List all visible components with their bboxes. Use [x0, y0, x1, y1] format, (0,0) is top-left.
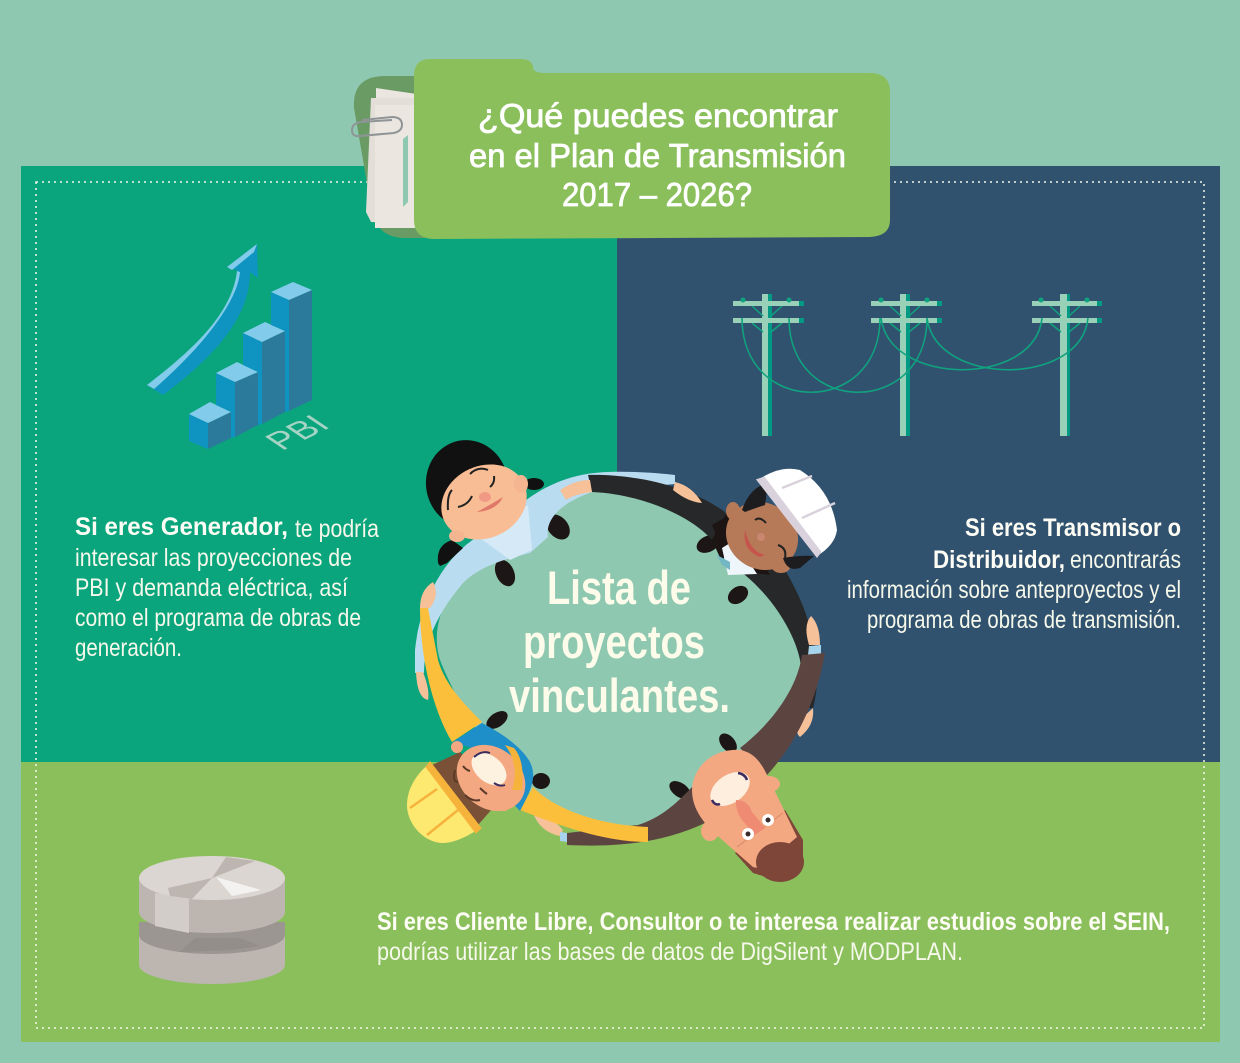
title folder — [352, 59, 890, 239]
yellow worker: cuff — [560, 832, 567, 842]
text: generador — [75, 513, 379, 662]
folder back — [354, 76, 440, 238]
yellow worker: vest — [453, 723, 533, 811]
bar 3 — [243, 322, 285, 425]
text: transmisor o distribuidor: Distribuidor, — [933, 546, 1065, 574]
text: generador: generación. — [75, 634, 182, 662]
text: transmisor o distribuidor: encontrarás — [1070, 546, 1181, 574]
text: lista de proyectos vinculantes — [509, 561, 730, 722]
lower disc — [139, 913, 285, 984]
text: transmisor o distribuidor — [847, 514, 1181, 634]
text: transmisor o distribuidor: Si eres Transmisor o — [965, 514, 1181, 542]
pole 3 — [1032, 294, 1102, 436]
pole 1 — [733, 294, 804, 436]
arrow — [147, 244, 258, 395]
bar 4 — [271, 282, 312, 412]
text: generador: te podría — [295, 515, 379, 543]
text: cliente libre o consultor: podrías utilizar las bases de datos de DigSilent y MODPLAN. — [377, 938, 963, 966]
icon: database — [139, 856, 285, 984]
bar 1 — [189, 402, 231, 449]
text: cliente libre o consultor — [377, 908, 1170, 966]
black-suit man: head and helmet — [712, 469, 837, 583]
hands — [416, 480, 820, 838]
icon: PBI growth bar chart — [147, 244, 338, 455]
shoes — [483, 510, 752, 803]
text: lista de proyectos vinculantes: Lista de — [547, 561, 691, 614]
panel: cliente libre o consultor — [21, 762, 1220, 1042]
text: lista de proyectos vinculantes: vinculantes. — [509, 669, 730, 722]
woman: head — [419, 434, 544, 566]
title text: ¿Qué puedes encontrar — [478, 97, 838, 134]
black-suit man: cuff — [808, 645, 821, 655]
text: generador: interesar las proyecciones de — [75, 544, 352, 572]
title text: 2017 – 2026? — [562, 176, 752, 213]
upper disc — [139, 878, 285, 933]
panel: generador — [21, 166, 617, 763]
papers — [366, 88, 430, 228]
title text: en el Plan de Transmisión — [469, 137, 846, 174]
pole 2 — [871, 294, 942, 436]
panel: transmisor o distribuidor — [617, 166, 1220, 763]
title text — [469, 97, 846, 213]
brown-suit man: sleeves — [567, 653, 825, 846]
icon: paperclip — [352, 117, 402, 136]
group of people holding hands — [407, 434, 837, 882]
yellow worker: head and helmet — [407, 731, 539, 843]
text: generador: Si eres Generador, — [75, 513, 288, 541]
brown-suit man: head — [692, 750, 804, 882]
icon: transmission poles — [733, 294, 1102, 436]
text: generador: PBI y demanda eléctrica, así — [75, 574, 348, 602]
black-suit man: sleeves and jacket — [588, 475, 817, 708]
central circle — [437, 490, 801, 826]
text: generador: como el programa de obras de — [75, 604, 361, 632]
folder front — [414, 59, 890, 239]
yellow worker: sleeves — [420, 608, 648, 842]
text: lista de proyectos vinculantes: proyectos — [523, 615, 705, 668]
PBI label: PBI — [257, 410, 338, 455]
bar 2 — [216, 362, 258, 438]
wires — [742, 318, 1088, 392]
woman: sleeves and torso — [415, 472, 675, 673]
